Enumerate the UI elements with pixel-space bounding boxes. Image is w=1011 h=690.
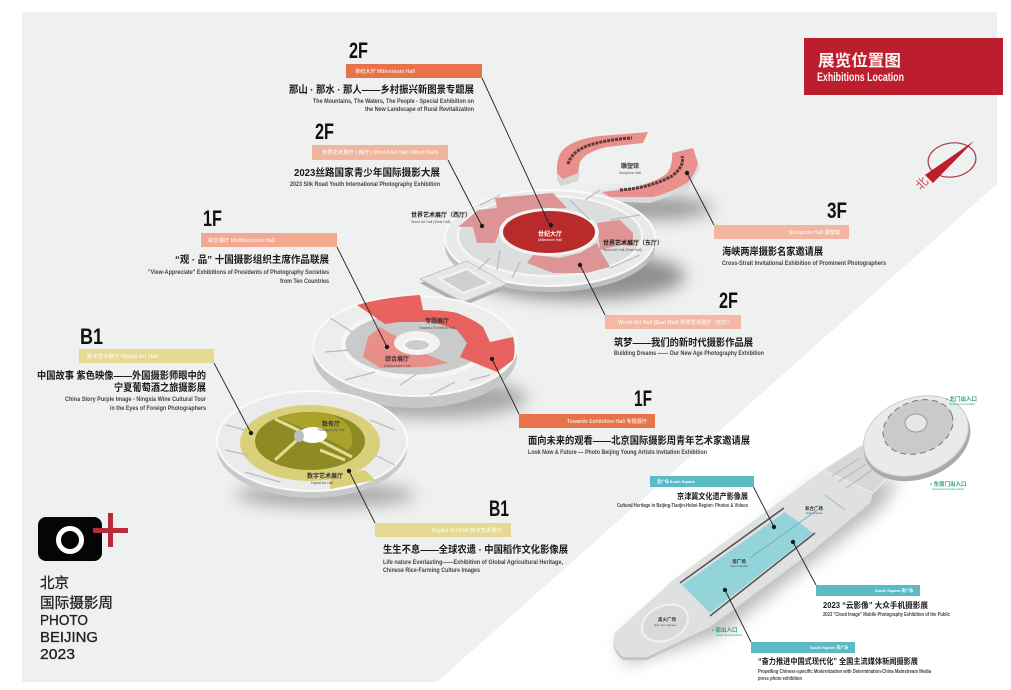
label: 3F Sculpture Hall: 3F xyxy=(827,198,847,223)
label: 2F World Art Hall East: World Art Hall (East Hall) 世界艺术展厅（东厅） xyxy=(618,319,732,326)
floor plan: 1F building: 专题展厅 xyxy=(425,317,449,325)
label: B1 Digital Art Hall left: B1 xyxy=(80,324,103,349)
label: 1F Towards Exhibition Hall: Towards Exhibition Hall 专题展厅 xyxy=(567,418,647,425)
floor plan: outdoor square: Unity Square xyxy=(805,511,823,515)
floor plan: B1 building: 数字艺术展厅 xyxy=(307,472,343,480)
floor plan: B1 building: Photography Hall xyxy=(318,428,345,432)
label: 3F Sculpture Hall: 海峡两岸摄影名家邀请展 xyxy=(722,245,823,258)
label: 2F World Art Hall West: 2023 Silk Road Youth International Photography Exhibition xyxy=(290,181,440,188)
entrance labels: • 北门出入口 xyxy=(946,395,977,403)
floor plan: 1F building: Multifunction Hall xyxy=(384,364,411,368)
entrance labels: • 东南门出入口 xyxy=(930,480,966,488)
label: 3F Sculpture Hall xyxy=(714,198,886,267)
floor plan: outdoor square: Holy Fire Square xyxy=(654,623,677,627)
label: 2F Millennium Hall: the New Landscape of Rural Revitalization xyxy=(365,106,474,113)
label: 1F Multifunction Hall: 1F xyxy=(203,206,222,231)
title block xyxy=(804,38,1003,95)
label: 3F Sculpture Hall: Cross-Strait Invitational Exhibition of Prominent Photographers xyxy=(722,260,886,267)
floor plan: 3F sculpture hall: 雕塑馆 xyxy=(621,162,639,170)
label: 2F World Art Hall East: 筑梦——我们的新时代摄影作品展 xyxy=(614,336,753,349)
entrance labels: North Entrance/Exit xyxy=(949,402,975,406)
floor plan: 1F building xyxy=(313,295,527,418)
icon: north compass xyxy=(913,140,978,193)
label: 3F Sculpture Hall: Sculpture Hall 雕塑馆 xyxy=(789,229,840,236)
floor plan: outdoor square: South Square xyxy=(730,564,748,568)
label: 1F Multifunction Hall xyxy=(148,206,337,285)
entrance labels: Southeast Entrance/Exit xyxy=(932,487,964,491)
label: B1 Digital Art Hall left: in the Eyes of Foreign Photographers xyxy=(110,405,206,412)
label: 2F Millennium Hall xyxy=(289,38,482,113)
label: B1 Digital Art Hall bottom: Digital Art Hall 数字艺术展厅 xyxy=(432,527,502,534)
floor plan: B1 building: 数有厅 xyxy=(322,420,340,428)
floor plan: 2F building: World Art Hall (East Hall) xyxy=(603,248,642,252)
label: B1 Digital Art Hall left xyxy=(37,324,214,412)
logo: Photo Beijing: BEIJING xyxy=(40,629,98,646)
logo: Photo Beijing: PHOTO xyxy=(40,612,88,629)
floor plan: 2F building: 世界艺术展厅（东厅） xyxy=(603,239,663,247)
label: B1 Digital Art Hall bottom: B1 xyxy=(489,496,509,521)
floor plan: 1F building: 综合展厅 xyxy=(385,355,409,363)
label: 2F Millennium Hall: The Mountains, The Waters, The People - Special Exhibition on xyxy=(313,98,474,105)
label: B1 Digital Art Hall left: 数字艺术展厅 Digital Art Hall xyxy=(87,353,159,360)
label: 2F World Art Hall West: 世界艺术展厅 | 西厅 | World Art Hall (West Hall) xyxy=(322,149,438,156)
label: 2F Millennium Hall: 世纪大厅 Millennium Hall xyxy=(355,68,416,75)
label: B1 Digital Art Hall left: 中国故事 紫色映像——外国摄影师眼中的 xyxy=(37,369,206,382)
label: 2F World Art Hall West: 2023丝路国家青少年国际摄影大展 xyxy=(294,166,440,179)
logo: Photo Beijing xyxy=(38,513,128,663)
entrance labels: • 南出入口 xyxy=(712,626,737,634)
label: B1 Digital Art Hall bottom xyxy=(375,496,568,574)
label: West Square: Cultural Heritage in Beijing-Tianjin-Hebei Region: Photos & Videos xyxy=(617,503,748,509)
label: 2F World Art Hall East xyxy=(605,288,764,357)
floor plan: 2F building xyxy=(411,190,685,306)
label: B1 Digital Art Hall left: 宁夏葡萄酒之旅摄影展 xyxy=(114,381,206,394)
label: 2F Millennium Hall: 那山 · 那水 · 那人——乡村振兴新图景专题展 xyxy=(289,83,474,96)
label: 1F Multifunction Hall: “观 · 品” 十国摄影组织主席作品联展 xyxy=(175,253,329,266)
title block: 展览位置图 xyxy=(818,51,901,70)
label: South Square: “奋力推进中国式现代化” 全国主流媒体新闻摄影展 xyxy=(758,656,918,666)
label: East Square: 2023 “云影像” 大众手机摄影展 xyxy=(823,600,928,610)
label: B1 Digital Art Hall bottom: 生生不息——全球农遗 · 中国稻作文化影像展 xyxy=(383,543,568,556)
entrance labels: South Entrance/Exit xyxy=(716,633,743,637)
floor plan: 1F building: Towards Exhibition Hall xyxy=(419,326,455,330)
label: South Square: press photo exhibition xyxy=(758,676,802,682)
label: 2F World Art Hall East: Building Dreams —— Our New Age Photography Exhibition xyxy=(614,350,764,357)
label: B1 Digital Art Hall bottom: Chinese Rice-Farming Culture Images xyxy=(383,567,480,574)
label: East Square xyxy=(816,585,950,618)
label: 1F Multifunction Hall: "View-Appreciate" Exhibitions of Presidents of Photography Societies xyxy=(148,269,329,276)
icon: north compass: 北 xyxy=(913,174,931,193)
label: 1F Towards Exhibition Hall xyxy=(519,386,750,456)
floor plan: 3F sculpture hall: Sculpture Hall xyxy=(619,171,641,175)
floor plan: 2F building: 世界艺术展厅（西厅） xyxy=(411,211,471,219)
entrance labels xyxy=(712,395,977,637)
floor plan: outdoor square xyxy=(614,382,982,665)
floor plan: 3F sculpture hall xyxy=(557,132,712,220)
label: 2F World Art Hall West: 2F xyxy=(315,119,334,144)
label: South Square: Propelling Chinese-specific Modernization with Determination-China Mainstream Media xyxy=(758,669,931,675)
label: 1F Towards Exhibition Hall: 1F xyxy=(634,386,652,411)
label: 1F Multifunction Hall: from Ten Countries xyxy=(280,278,329,285)
label: East Square: South Square 南广场 xyxy=(875,587,913,593)
logo: Photo Beijing: 国际摄影周 xyxy=(40,595,113,612)
floor plan: 2F building: 世纪大厅 xyxy=(538,230,562,238)
label: 1F Towards Exhibition Hall: 面向未来的观看——北京国际摄影周青年艺术家邀请展 xyxy=(528,434,750,447)
label: 2F World Art Hall West xyxy=(290,119,448,188)
floor plan: B1 building: Digital Art Hall xyxy=(311,481,333,485)
floor plan: 2F building: Millennium Hall xyxy=(538,238,562,242)
label: South Square xyxy=(751,642,931,682)
label: B1 Digital Art Hall left: China Story Purple Image - Ningxia Wine Cultural Tour xyxy=(65,396,206,403)
floor plan: outdoor square: 奥火广场 xyxy=(658,616,676,623)
label: West Square xyxy=(617,476,754,509)
floor plan: 2F building: World Art Hall (West Hall) xyxy=(411,220,451,224)
label: East Square: 2023 "Cloud Image" Mobile Photography Exhibition of the Public xyxy=(823,612,950,618)
logo: Photo Beijing: 北京 xyxy=(40,575,69,592)
label: 2F Millennium Hall: 2F xyxy=(349,38,368,63)
floor plan: outdoor square: 和合广场 xyxy=(805,505,823,512)
label: West Square: 西广场 South Square xyxy=(657,478,696,484)
leader lines and markers xyxy=(214,78,816,642)
label: West Square: 京津冀文化遗产影像展 xyxy=(677,491,748,501)
title block: Exhibitions Location xyxy=(817,70,904,84)
label: 2F World Art Hall East: 2F xyxy=(719,288,738,313)
label: 1F Towards Exhibition Hall: Look Now & Future — Photo Beijing Young Artists Invitation Exhibition xyxy=(528,449,707,456)
logo: Photo Beijing: 2023 xyxy=(40,646,75,663)
label: B1 Digital Art Hall bottom: Life nature Everlasting——Exhibition of Global Agricultural Heritage, xyxy=(383,559,563,566)
floor plan: B1 building xyxy=(217,391,415,507)
label: South Square: South Square 南广场 xyxy=(810,644,848,650)
floor plan: outdoor square: 南广场 xyxy=(732,558,746,565)
label: 1F Multifunction Hall: 综合展厅 Multifunction Hall xyxy=(208,237,276,244)
